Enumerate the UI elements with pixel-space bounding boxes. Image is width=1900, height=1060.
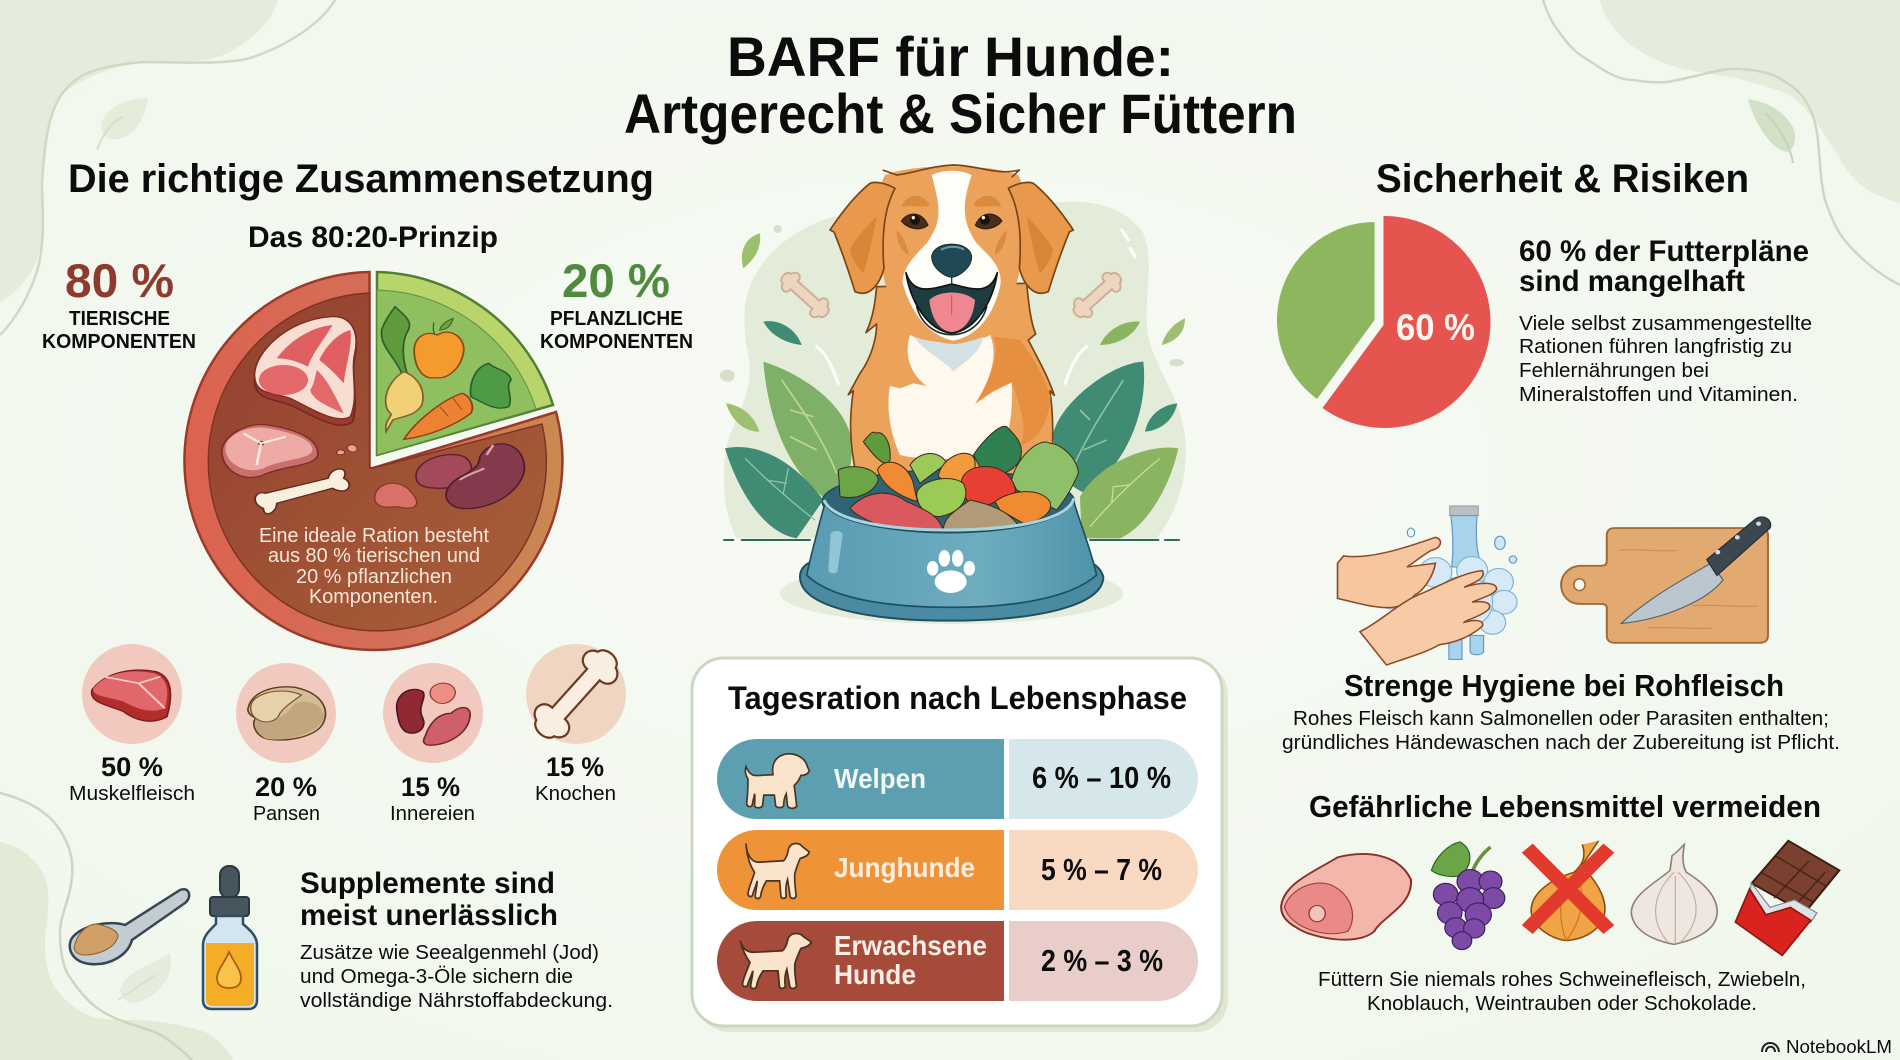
icon: grapes [1431,842,1505,950]
row: young dogs [717,830,1198,910]
food bowl [800,426,1103,621]
illustration: happy dog with food bowl [720,165,1186,624]
dog top fur line [883,165,1019,177]
row: puppies: Welpen [834,763,926,794]
row: young dogs: Junghunde [834,852,975,883]
dog body shading [975,337,1051,447]
paw print [927,550,975,593]
text: supplements: und Omega-3-Öle sichern die [300,965,573,988]
row: adult dogs: Erwachsene [834,930,987,961]
ground line [724,537,1179,543]
label: 20 percent plant: PFLANZLICHE [550,308,683,330]
text: hygiene: Rohes Fleisch kann Salmonellen oder Parasiten enthalten; [1293,707,1829,730]
breakdown: animal components [69,641,627,825]
text: hygiene: Strenge Hygiene bei Rohfleisch [1344,668,1784,703]
icon: chocolate bar [1735,841,1839,955]
row: puppies [717,739,1198,819]
bowl body [807,500,1097,607]
panel heading: Tagesration nach Lebensphase [728,680,1187,716]
dog blaze and muzzle [903,171,1001,341]
row: adult dogs [717,921,1198,1001]
icon: garlic [1631,844,1717,944]
text: supplements: Supplemente sind [300,867,555,900]
dog eyebrow patches [897,196,1007,255]
row: young dogs: 5 % – 7 % [1041,852,1162,887]
icon: washing hands [1338,506,1517,665]
dog chin [917,307,987,335]
dog [830,165,1073,477]
label: 20 percent plant: 20 % [562,254,670,307]
heading: safety and risks: Sicherheit & Risiken [1376,157,1749,201]
item: organs 15 percent: 15 % [401,772,460,802]
label: 80 percent animal [42,254,196,353]
title: Artgerecht & Sicher Füttern [624,82,1297,145]
pie chart: 60 percent deficient [1277,216,1490,428]
label: 80 percent animal: KOMPONENTEN [42,331,196,353]
leaves [720,225,1185,538]
text: ideal ration [259,524,489,608]
icon: spoon with powder [70,889,189,964]
text: supplements: meist unerlässlich [300,899,558,932]
item: bones 15 percent [525,641,627,805]
dog ears [830,182,895,293]
heading: dangerous foods: Gefährliche Lebensmittel vermeiden [1309,789,1821,824]
item: bones 15 percent: 15 % [546,752,604,782]
icon: raw pork [1281,854,1411,940]
text: deficient plans: sind mangelhaft [1519,265,1745,298]
icons: dangerous foods [1281,841,1839,955]
text: dangerous foods note: Füttern Sie niemals rohes Schweinefleisch, Zwiebeln, [1318,968,1806,991]
pie chart: 60 percent deficient: 60 % [1396,307,1475,348]
item: organs 15 percent: Innereien [390,802,475,825]
icons: vegetables in the slice [381,307,511,439]
icon: oil dropper bottle [203,866,257,1009]
label: 80 percent animal: TIERISCHE [69,308,170,330]
text: supplements: vollständige Nährstoffabdeckung. [300,989,613,1012]
dog chin shadow [913,337,983,372]
icon: left bone [776,267,834,323]
text: deficient plans: 60 % der Futterpläne [1519,235,1809,268]
item: organs 15 percent [383,663,483,825]
text: ideal ration: 20 % pflanzlichen [296,565,452,588]
item: rumen 20 percent: 20 % [255,772,317,802]
icon: crossed onion [1527,841,1609,941]
dog mouth [906,273,997,333]
title: BARF für Hunde: [727,25,1174,88]
heading: composition: Die richtige Zusammensetzung [68,157,654,201]
icons: meat and bone in the slice [222,317,525,514]
text: dangerous foods note [1318,968,1806,1015]
dog chest [888,335,1012,459]
background blob [724,202,1186,538]
item: muscle meat 50 percent: 50 % [101,752,163,782]
row: adult dogs: Hunde [834,959,916,990]
text: deficient plans: Rationen führen langfristig zu [1519,335,1792,358]
bowl base [800,561,1103,621]
logo: NotebookLM: NotebookLM [1786,1037,1892,1057]
text: supplements: Zusätze wie Seealgenmehl (Jod) [300,941,599,964]
row: puppies: 6 % – 10 % [1032,760,1171,795]
dog body [848,283,1054,477]
decoration: bottom-left corner [0,793,233,1060]
item: muscle meat 50 percent: Muskelfleisch [69,782,195,805]
text: dangerous foods note: Knoblauch, Weintrauben oder Schokolade. [1367,992,1757,1015]
decoration: top-right corner [1543,0,1900,285]
dog head [878,166,1025,344]
item: muscle meat 50 percent [69,644,195,805]
slice: animal 80 percent [184,272,562,650]
panel: daily ration by life stage [692,658,1228,1032]
label: 80 percent animal: 80 % [65,254,174,307]
dog tongue [929,292,975,332]
text: supplements [300,867,613,1012]
bowl opening [822,470,1074,533]
label: 20 percent plant: KOMPONENTEN [540,331,693,353]
title [624,25,1297,145]
text: ideal ration: Komponenten. [309,585,438,608]
icon: cutting board and knife [1561,517,1771,643]
dog nose [932,244,972,277]
label: 20 percent plant [540,254,693,353]
text: ideal ration: aus 80 % tierischen und [268,544,480,567]
text: deficient plans: Mineralstoffen und Vitaminen. [1519,383,1798,406]
text: ideal ration: Eine ideale Ration besteht [259,524,489,547]
text: deficient plans: Viele selbst zusammengestellte [1519,312,1812,335]
row: adult dogs: 2 % – 3 % [1041,943,1163,978]
text: hygiene [1282,668,1840,754]
slice: plant 20 percent [377,272,553,455]
text: deficient plans: Fehlernährungen bei [1519,359,1709,382]
icon: right bone [1068,267,1127,323]
decoration: top-left corner [0,0,335,335]
text: deficient plans [1519,235,1812,406]
item: bones 15 percent: Knochen [535,782,616,805]
subheading: 80:20 principle: Das 80:20-Prinzip [248,221,498,254]
ground shadow [780,563,1123,624]
dog eyes [901,214,1002,229]
pie chart: 80:20 ration [184,272,562,650]
food: greens and vegetables [838,426,1078,532]
item: rumen 20 percent [236,663,336,825]
item: rumen 20 percent: Pansen [253,802,320,825]
text: hygiene: gründliches Händewaschen nach der Zubereitung ist Pflicht. [1282,731,1840,754]
